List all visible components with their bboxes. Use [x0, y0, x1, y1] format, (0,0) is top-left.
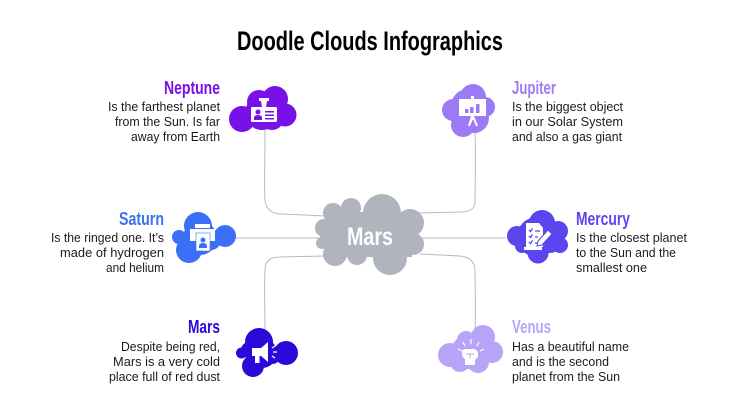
- heading: Saturn: Saturn: [119, 209, 164, 229]
- text: Jupiter description: [512, 99, 623, 144]
- text: Jupiter description: and also a gas giant: [512, 129, 622, 144]
- icon: Jupiter cloud with presentation board: [442, 84, 495, 137]
- text: Mercury description: Is the closest planet: [576, 230, 687, 245]
- panel: Jupiter: [442, 78, 623, 144]
- central label: Mars: [347, 223, 393, 251]
- text: Neptune description: [108, 99, 221, 144]
- title: Doodle Clouds Infographics: [237, 26, 503, 56]
- text: Neptune description: Is the farthest planet: [108, 99, 220, 114]
- text: Mars description: Mars is a very cold: [113, 354, 220, 369]
- heading: Jupiter: Jupiter: [512, 78, 556, 98]
- text: Neptune description: away from Earth: [131, 129, 220, 144]
- text: Saturn description: [51, 230, 164, 275]
- text: Jupiter description: in our Solar System: [512, 114, 623, 129]
- text: Mars description: Despite being red,: [121, 339, 220, 354]
- text: Saturn description: made of hydrogen: [60, 245, 164, 260]
- text: Mercury description: smallest one: [576, 260, 647, 275]
- icon: Mars cloud with megaphone: [236, 328, 298, 377]
- text: Mars description: [109, 339, 220, 384]
- text: Mercury description: to the Sun and the: [576, 245, 676, 260]
- heading: Venus: Venus: [512, 317, 551, 337]
- icon: Saturn cloud with printer: [172, 212, 236, 263]
- central cloud: Mars: [315, 194, 424, 275]
- connector lines: [236, 130, 506, 332]
- text: Venus description: Has a beautiful name: [512, 339, 629, 354]
- icon: Mercury cloud with checklist and pencil: [507, 210, 568, 264]
- panel: Neptune: [108, 78, 296, 144]
- panel: Mercury: [507, 209, 687, 275]
- panel: Venus: [438, 317, 629, 384]
- heading: Mercury: Mercury: [576, 209, 630, 229]
- text: Venus description: planet from the Sun: [512, 369, 620, 384]
- heading: Mars: Mars: [188, 317, 220, 337]
- text: Jupiter description: Is the biggest object: [512, 99, 623, 114]
- text: Mercury description: [576, 230, 687, 275]
- text: Neptune description: from the Sun. Is far: [115, 114, 221, 129]
- heading: Neptune: Neptune: [164, 78, 220, 98]
- icon: Neptune cloud with ID badge: [229, 86, 296, 132]
- panel: Mars: [109, 317, 298, 384]
- text: Venus description: [512, 339, 629, 384]
- icon: Venus cloud with fist and sparks: [438, 325, 503, 373]
- text: Saturn description: and helium: [106, 260, 164, 275]
- text: Mars description: place full of red dust: [109, 369, 220, 384]
- text: Saturn description: Is the ringed one. It’s: [51, 230, 164, 245]
- text: Venus description: and is the second: [512, 354, 609, 369]
- panel: Saturn: [51, 209, 236, 275]
